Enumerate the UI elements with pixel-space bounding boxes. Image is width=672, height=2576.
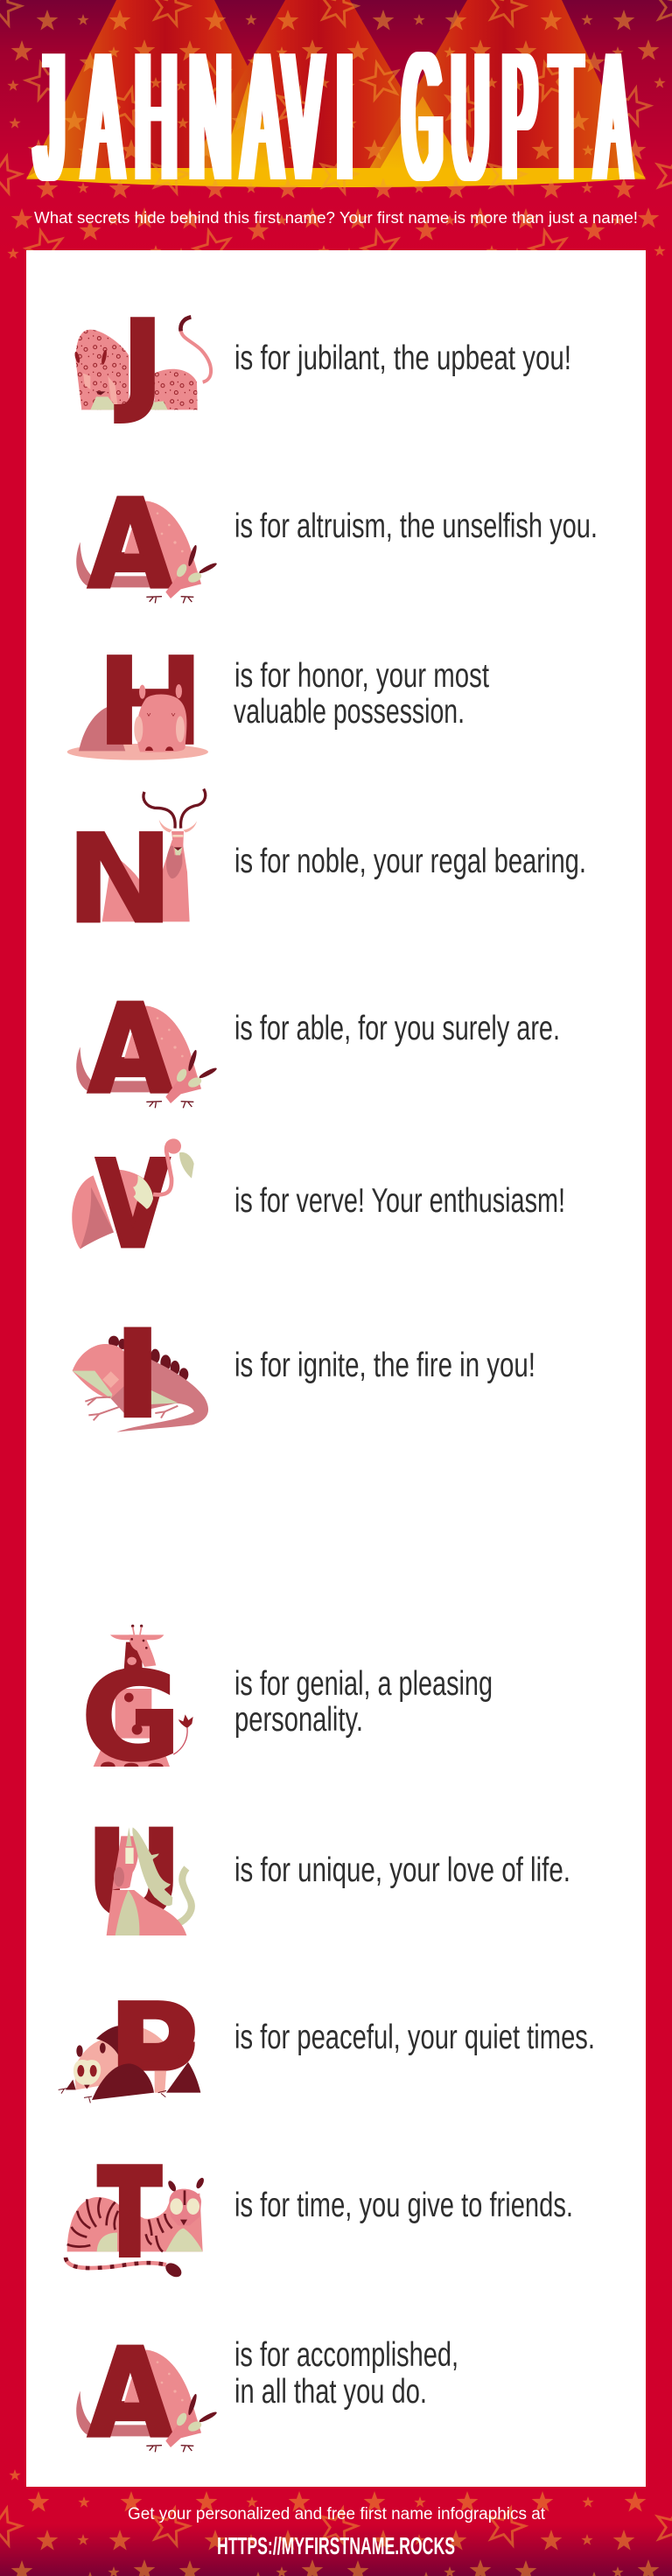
caption: A third: is for accomplished,: [234, 2336, 458, 2374]
footer link: HTTPS://MYFIRSTNAME.ROCKS: [217, 2532, 455, 2559]
row: A: [76, 474, 598, 616]
illustration: T tiger: [64, 2143, 206, 2283]
caption: I: is for ignite, the fire in you!: [234, 1347, 536, 1384]
row: G: personality.: [234, 1701, 363, 1739]
illustration: G giraffe: G: [80, 1647, 181, 1789]
caption: H: is for honor, your most: [234, 657, 489, 695]
row: A third: [76, 2323, 458, 2465]
row: A second: [76, 979, 560, 1121]
illustration: A armadillo: [76, 2323, 218, 2465]
caption: U: is for unique, your love of life.: [234, 1852, 570, 1889]
illustration: J leopard: [74, 297, 211, 426]
row: V: [72, 1137, 565, 1275]
caption: G: is for genial, a pleasing: [234, 1665, 493, 1703]
illustration: N gazelle: [65, 789, 206, 952]
row: T: [64, 2143, 573, 2283]
row: J: [74, 297, 571, 426]
row: N: [65, 789, 586, 952]
illustration: I iguana: [73, 1304, 208, 1447]
illustration: H hippo: H: [94, 631, 206, 774]
row: G: [80, 1625, 493, 1789]
row: A third: in all that you do.: [234, 2373, 427, 2411]
illustration: J leopard: J: [115, 297, 163, 426]
illustration: N gazelle: N: [65, 807, 175, 952]
row: U: [84, 1803, 570, 1946]
footer text: Get your personalized and free first name infographics at: [128, 2505, 546, 2524]
subtitle: What secrets hide behind this first name? Your first name is more than just a name!: [34, 208, 638, 227]
star pattern: top: [0, 0, 672, 261]
illustration: P loris: P: [108, 1977, 200, 2123]
caption: J: is for jubilant, the upbeat you!: [234, 340, 571, 377]
title: [36, 14, 630, 219]
star pattern: bottom: [0, 2469, 672, 2576]
illustration: V flamingo: V: [96, 1137, 170, 1275]
illustration: P loris: [59, 1977, 200, 2123]
title: GUPTA: [403, 15, 630, 219]
illustration: V flamingo: [72, 1137, 194, 1275]
illustration: A armadillo: [76, 979, 218, 1121]
row: H: valuable possession.: [234, 693, 465, 731]
illustration: I iguana: I: [111, 1304, 164, 1447]
row: P: [59, 1977, 595, 2123]
spotlights: [26, 0, 646, 187]
row: I: [73, 1304, 536, 1447]
illustration: T tiger: T: [99, 2143, 161, 2283]
illustration: A armadillo: [76, 474, 218, 616]
title: JAHNAVI: [36, 14, 353, 219]
illustration: U unicorn: U: [84, 1803, 184, 1946]
caption: V: is for verve! Your enthusiasm!: [234, 1182, 565, 1220]
caption: A second: is for able, for you surely are.: [234, 1010, 560, 1047]
row: H: [67, 631, 489, 774]
